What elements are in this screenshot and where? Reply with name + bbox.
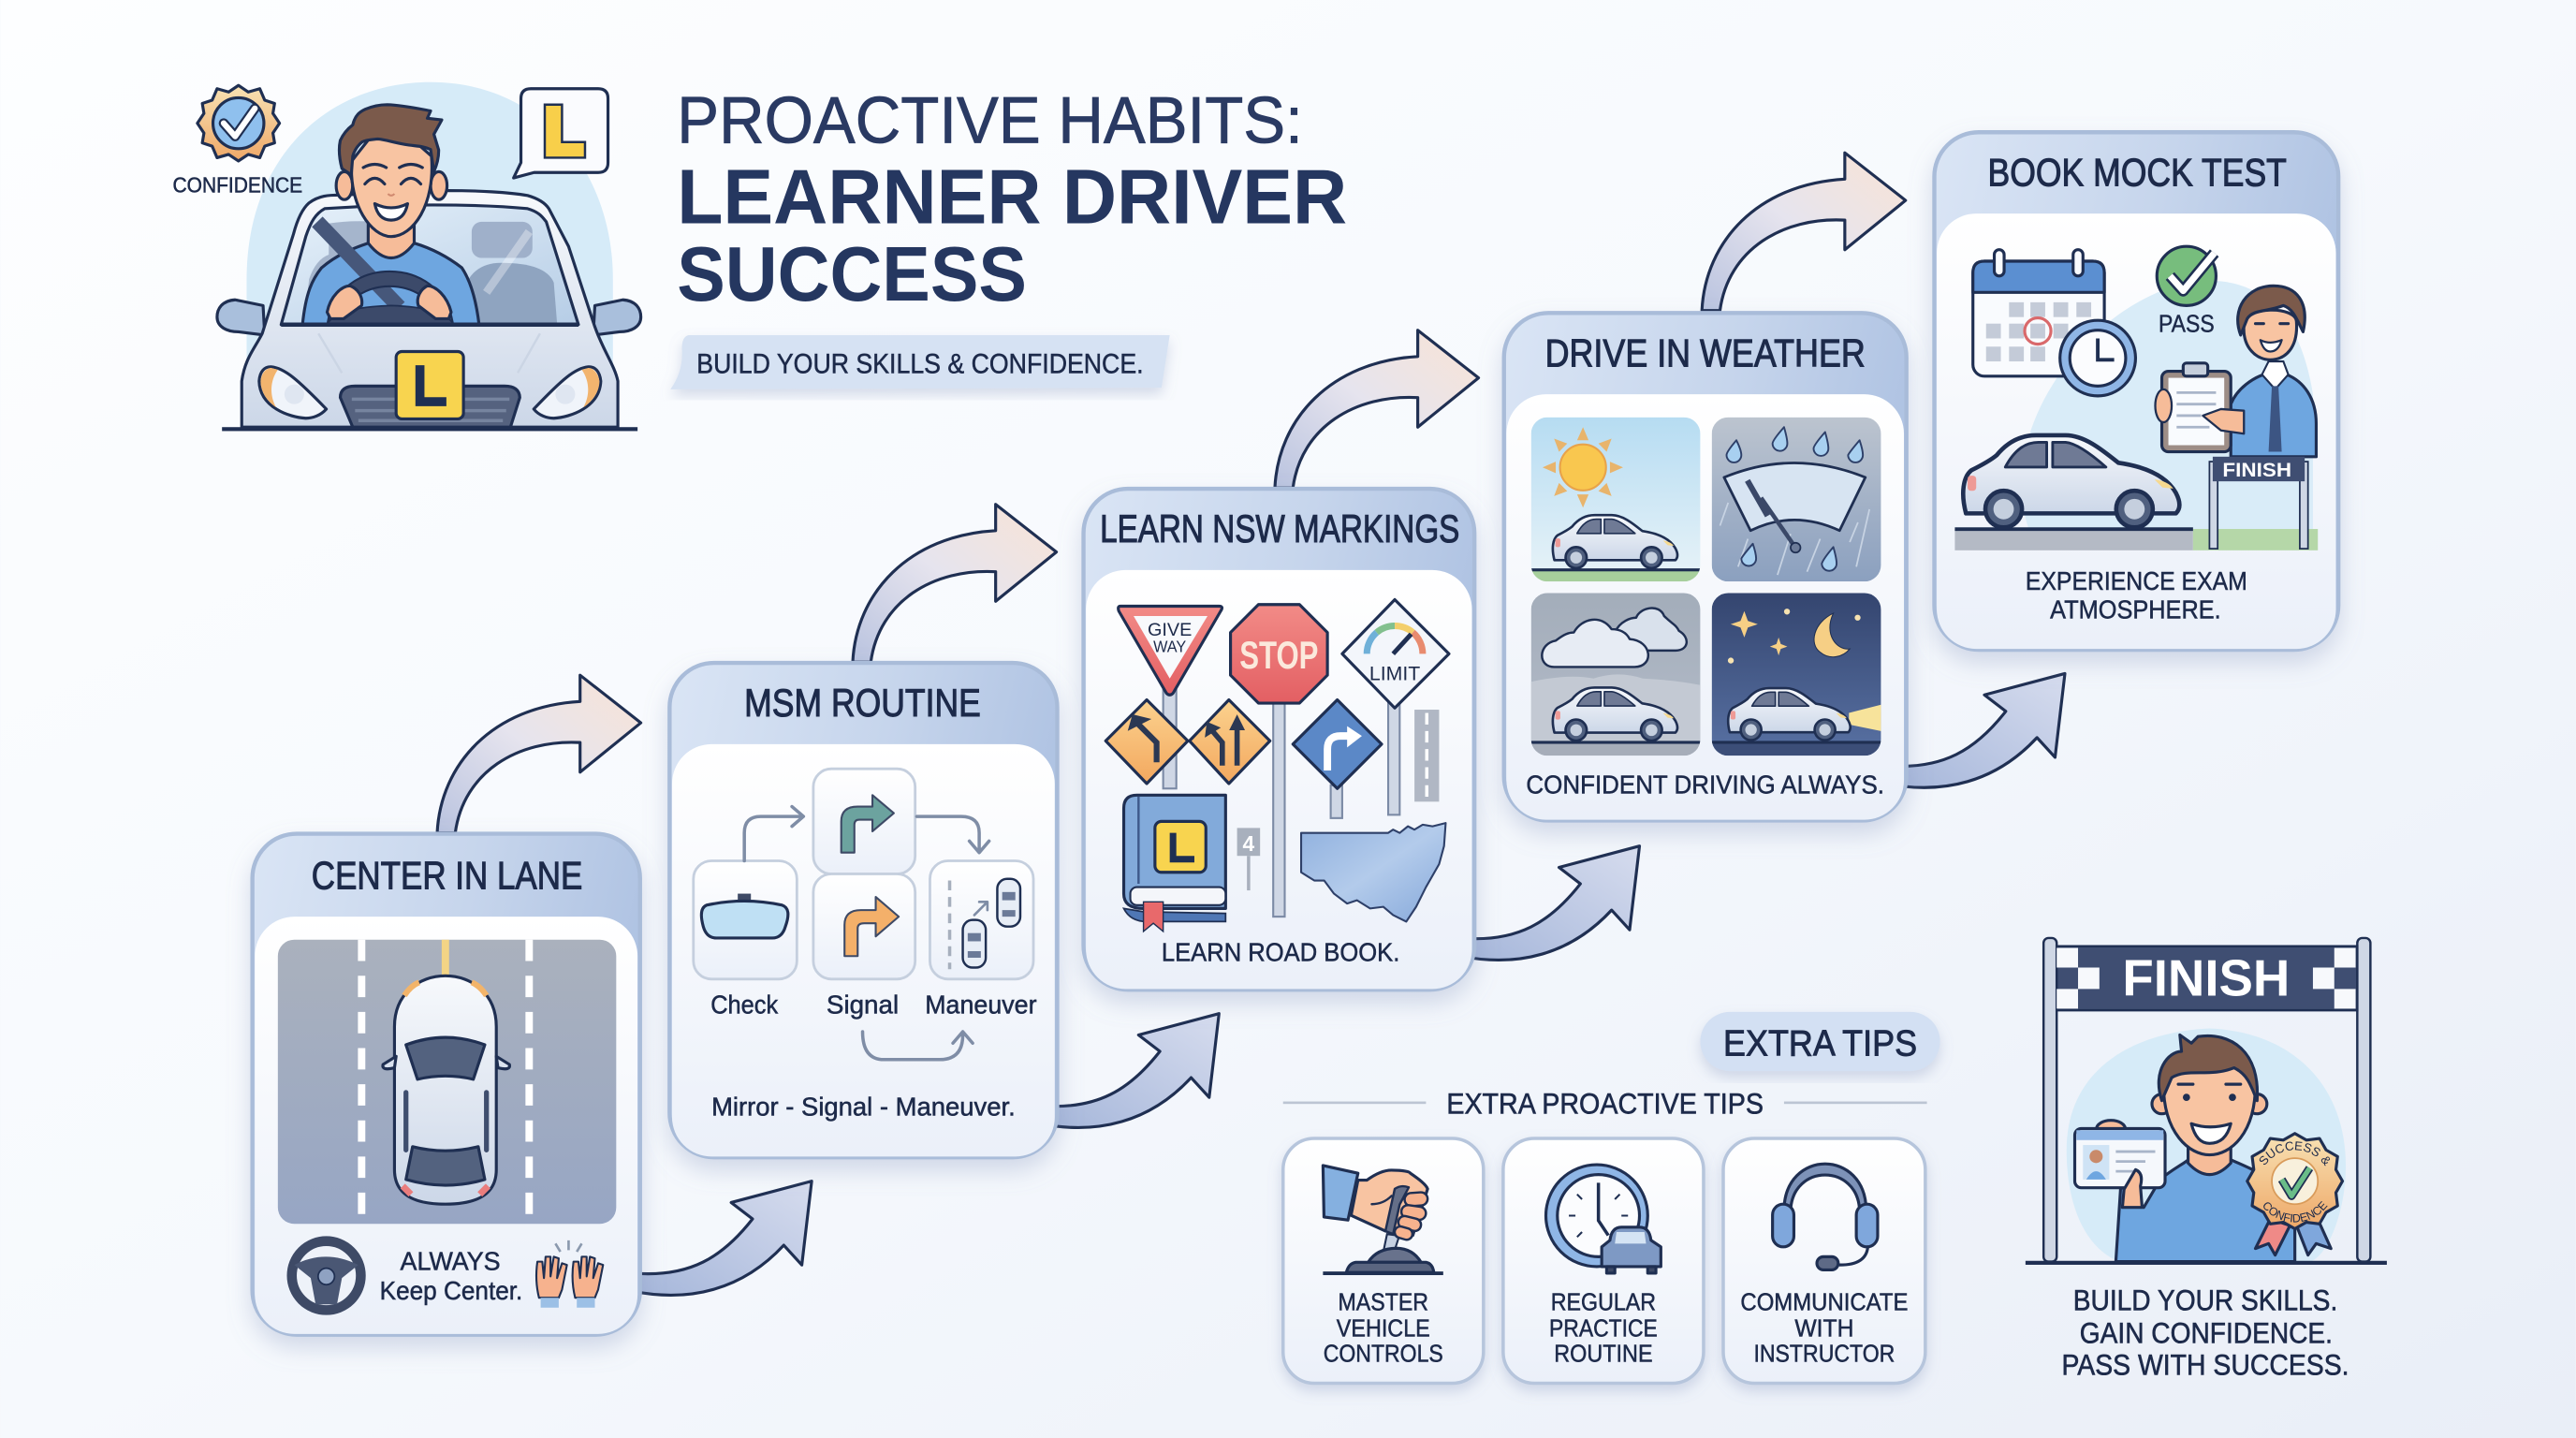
label: PRACTICE (1549, 1313, 1658, 1342)
graduate body (2115, 1160, 2295, 1262)
speed limit sign (1342, 599, 1449, 708)
caption: LEARN ROAD BOOK. (1162, 938, 1399, 967)
blue diamond: turn (1293, 700, 1382, 788)
heading: LEARN NSW MARKINGS (1100, 506, 1459, 550)
arrow: NSW markings to weather (1275, 330, 1479, 488)
panel: learn NSW markings (1084, 489, 1474, 990)
stop sign: STOP (1239, 633, 1318, 677)
caption: ALWAYS (401, 1246, 501, 1275)
label (1740, 1287, 1908, 1368)
blue backdrop blob (247, 82, 613, 394)
road (278, 940, 616, 1224)
success badge (2246, 1132, 2344, 1256)
ground line (222, 427, 637, 431)
driver seat (304, 221, 402, 324)
pass check (2157, 246, 2216, 337)
heading: MSM ROUTINE (744, 681, 981, 725)
left hand (327, 286, 362, 318)
caption (380, 1246, 522, 1305)
NSW map (1301, 823, 1445, 921)
speech bubble with L (514, 89, 608, 178)
finish banner (2056, 946, 2357, 1010)
left headlight (259, 367, 327, 418)
heading: BOOK MOCK TEST (1988, 150, 2287, 194)
road book (1124, 795, 1225, 932)
caption: Keep Center. (380, 1276, 522, 1305)
success badge: CONFIDENCE (2263, 1200, 2328, 1223)
tile: cloudy (1531, 593, 1700, 756)
small distance sign: 4 (1243, 831, 1255, 856)
sign posts (1164, 690, 1399, 917)
speed limit sign: LIMIT (1369, 663, 1420, 684)
clipboard (2155, 363, 2244, 452)
caption: ATMOSPHERE. (2050, 595, 2221, 624)
extra proactive tips heading: EXTRA PROACTIVE TIPS (1446, 1087, 1764, 1121)
windshield (281, 205, 578, 325)
backdrop blob (2022, 281, 2313, 529)
road strip (1414, 710, 1439, 801)
small distance sign (1237, 828, 1260, 890)
connector: signal below to maneuver (863, 1032, 973, 1060)
tile: night (1712, 593, 1881, 756)
licence card (2075, 1121, 2165, 1208)
give way sign (1119, 606, 1222, 695)
steering wheel icon (292, 1241, 360, 1310)
connector: check to signal (744, 807, 803, 860)
label: INSTRUCTOR (1753, 1340, 1895, 1368)
hero illustration: learner driver in car (217, 82, 641, 431)
icon: headset (1773, 1164, 1878, 1269)
extra tips pill (1700, 1012, 1940, 1071)
caption (2026, 566, 2247, 624)
success badge: SUCCESS & (2260, 1141, 2330, 1167)
tile: orange arrow (813, 874, 915, 979)
backdrop blob (2067, 1028, 2346, 1262)
tip card: regular practice routine (1503, 1138, 1704, 1383)
grille (341, 386, 520, 427)
connector: signal to maneuver (916, 816, 989, 853)
hood line (281, 323, 578, 326)
subtitle ribbon (670, 335, 1170, 389)
right headlight (534, 367, 601, 418)
driver torso (302, 243, 479, 325)
title: PROACTIVE HABITS: (677, 83, 1303, 157)
give way sign: GIVE (1148, 621, 1192, 640)
labels: Signal (827, 990, 899, 1020)
stop sign (1231, 605, 1327, 703)
hood creases (318, 333, 540, 373)
finish sign (2209, 457, 2308, 549)
steering wheel (328, 271, 453, 322)
tile: sunny (1531, 418, 1700, 581)
tile: mirror (694, 860, 797, 979)
left mirror (217, 300, 265, 335)
panel: MSM routine (669, 663, 1057, 1157)
lower arrow from center in lane (633, 1181, 812, 1295)
calendar (1973, 250, 2104, 376)
give way sign: WAY (1153, 638, 1186, 656)
closing message (2061, 1283, 2349, 1382)
panel: drive in weather (1504, 313, 1907, 820)
label (1549, 1287, 1658, 1368)
closing message: BUILD YOUR SKILLS. (2073, 1283, 2337, 1316)
neck (368, 220, 414, 257)
tile: rain (1712, 418, 1881, 581)
arrow: center in lane to MSM routine (437, 675, 641, 833)
title: LEARNER DRIVER (677, 154, 1347, 241)
gate posts (2043, 938, 2370, 1262)
caption: CONFIDENT DRIVING ALWAYS. (1526, 770, 1884, 800)
seat belt (317, 222, 400, 307)
finish sign: FINISH (2222, 460, 2291, 481)
icon: clock and car (1545, 1165, 1661, 1273)
neck (2188, 1137, 2231, 1175)
label: COMMUNICATE (1740, 1287, 1908, 1315)
heading: DRIVE IN WEATHER (1545, 330, 1866, 374)
tip card: master vehicle controls (1283, 1138, 1484, 1383)
clock (2060, 320, 2135, 396)
label: ROUTINE (1554, 1340, 1653, 1368)
lower arrow from NSW markings (1460, 846, 1640, 960)
right mirror (593, 300, 641, 335)
closing message: GAIN CONFIDENCE. (2080, 1315, 2333, 1349)
examiner (2231, 286, 2316, 457)
right hand (417, 286, 451, 318)
ground line (2026, 1261, 2387, 1265)
steering column (327, 305, 454, 325)
lower arrow from weather (1886, 673, 2065, 787)
car (1963, 435, 2179, 527)
label: WITH (1794, 1313, 1854, 1342)
caption: EXPERIENCE EXAM (2026, 566, 2247, 595)
icon: gear stick hand (1323, 1166, 1443, 1275)
title (677, 83, 1347, 317)
ground (1954, 527, 2318, 550)
label: REGULAR (1551, 1287, 1656, 1315)
driver face (336, 105, 447, 237)
finish banner: FINISH (2122, 949, 2290, 1006)
subtitle ribbon: BUILD YOUR SKILLS & CONFIDENCE. (696, 348, 1144, 379)
orange diamond: curve (1105, 700, 1188, 784)
lower arrow from MSM routine (1040, 1014, 1219, 1127)
label: VEHICLE (1337, 1313, 1430, 1342)
graduate face (2152, 1034, 2267, 1155)
confidence badge: CONFIDENCE (173, 172, 302, 197)
labels: Check (710, 990, 779, 1020)
panel: book mock test (1934, 132, 2338, 650)
hands icon (536, 1240, 603, 1308)
L plate on bonnet (396, 352, 463, 418)
top view car (383, 976, 509, 1204)
closing message: PASS WITH SUCCESS. (2061, 1348, 2349, 1382)
caption: Mirror - Signal - Maneuver. (711, 1092, 1016, 1121)
pass check: PASS (2159, 309, 2215, 337)
panel: center in lane (253, 834, 640, 1335)
labels (710, 990, 1037, 1020)
title: SUCCESS (677, 231, 1027, 317)
labels: Maneuver (925, 990, 1037, 1020)
label: CONTROLS (1324, 1340, 1443, 1368)
confidence badge (173, 85, 302, 197)
label: MASTER (1339, 1287, 1428, 1315)
heading: CENTER IN LANE (312, 853, 582, 897)
arrow: weather to mock test (1702, 153, 1906, 311)
passenger seat (461, 222, 557, 324)
tile: lane change (929, 860, 1033, 979)
extra tips pill: EXTRA TIPS (1723, 1023, 1917, 1064)
arrow: MSM routine to NSW markings (853, 505, 1057, 662)
car body (242, 191, 618, 427)
label (1324, 1287, 1443, 1368)
tile: teal arrow (813, 769, 915, 874)
finish gate illustration (2026, 936, 2387, 1265)
tip card: communicate with instructor (1723, 1138, 1925, 1383)
orange diamond: lanes (1190, 700, 1270, 784)
